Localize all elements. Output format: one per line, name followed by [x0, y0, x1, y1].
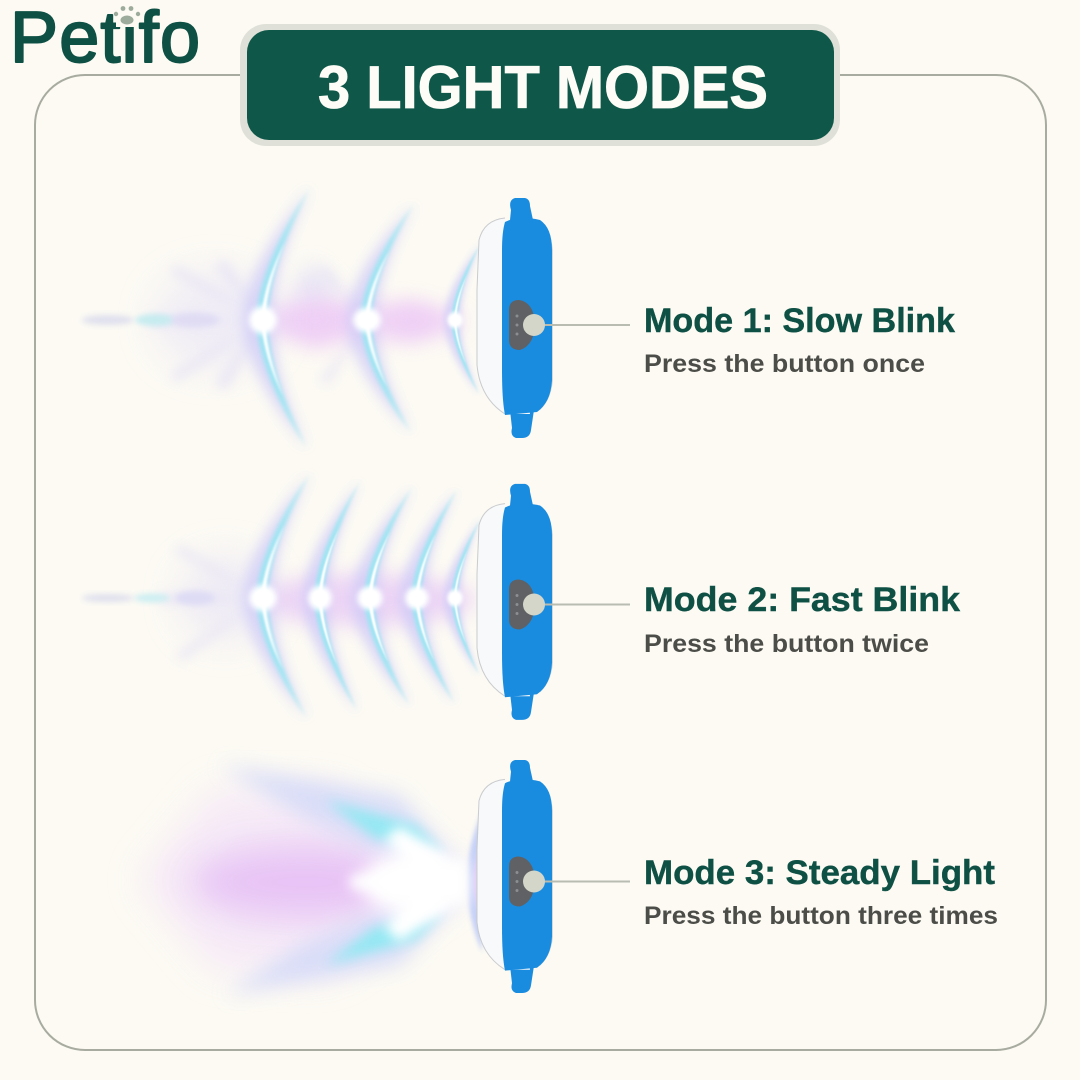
mode 3 label: Mode 3: Steady Light — [644, 854, 995, 892]
mode 2 label: Press the button twice — [644, 630, 929, 658]
device 1 with connector — [477, 198, 630, 438]
light arcs — [243, 474, 481, 718]
device 2 with connector — [477, 484, 630, 720]
mode 1 label: Mode 1: Slow Blink — [644, 302, 955, 340]
logo: Petifo: Petifo — [10, 0, 200, 78]
mode 2 light effect — [82, 474, 481, 718]
light arcs — [243, 188, 481, 448]
mode 2 label — [644, 581, 960, 658]
mode 3 label — [644, 854, 998, 930]
mode 3 label: Press the button three times — [644, 902, 998, 930]
mode 3 light effect — [140, 765, 482, 995]
mode 1 label: Press the button once — [644, 350, 925, 378]
mode 1 light effect — [82, 188, 481, 448]
icon: paw — [114, 6, 140, 24]
title banner: 3 LIGHT MODES — [318, 54, 768, 121]
title banner — [240, 24, 840, 146]
mode 1 label — [644, 302, 955, 378]
device 3 with connector — [477, 760, 630, 993]
mode 2 label: Mode 2: Fast Blink — [644, 581, 960, 619]
